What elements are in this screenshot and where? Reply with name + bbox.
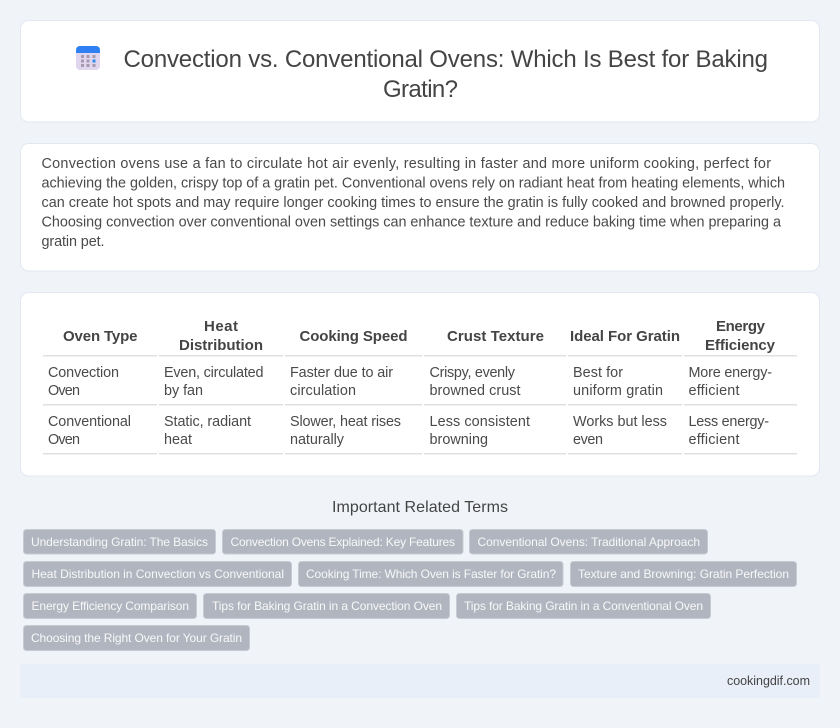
table row: convection oven: More energy- <box>688 365 772 381</box>
intro paragraph: achieving the golden, crispy top of a gratin pet. Conventional ovens rely on radiant heat from heating elements, which <box>42 176 785 192</box>
intro paragraph <box>42 156 785 250</box>
table header row: Cooking Speed <box>300 328 408 345</box>
table header row: Crust Texture <box>447 328 544 345</box>
tag <box>570 562 796 586</box>
tag <box>222 530 463 554</box>
panel: intro text <box>20 144 820 271</box>
tag <box>24 594 196 618</box>
title: Gratin? <box>383 76 458 103</box>
table header row: Oven Type <box>63 328 138 345</box>
panel: title header <box>20 20 820 122</box>
table row: conventional oven: Conventional <box>48 414 131 430</box>
tag: Cooking Time: Which Oven is Faster for Gratin? <box>306 567 556 581</box>
table row: convection oven: Crispy, evenly <box>430 365 516 381</box>
table row: convection oven: Oven <box>48 383 80 399</box>
table row: convection oven: circulation <box>290 383 356 399</box>
tag <box>456 594 710 618</box>
tag <box>24 626 250 650</box>
tag: Energy Efficiency Comparison <box>32 599 189 613</box>
table row: convection oven: by fan <box>164 383 203 399</box>
icon: calendar <box>76 46 100 70</box>
table row: conventional oven: efficient <box>688 432 740 448</box>
table row: convection oven: browned crust <box>430 383 520 399</box>
table header row: Distribution <box>179 337 263 354</box>
table row: conventional oven: heat <box>164 432 192 448</box>
intro paragraph: Convection ovens use a fan to circulate hot air evenly, resulting in faster and more uniform cooking, perfect for <box>42 156 771 172</box>
tag <box>470 530 708 554</box>
table row: conventional oven: browning <box>430 432 488 448</box>
table header row: Ideal For Gratin <box>570 328 680 345</box>
tag <box>24 530 216 554</box>
table row: conventional oven: Less consistent <box>430 414 530 430</box>
tag: Heat Distribution in Convection vs Conventional <box>32 567 284 581</box>
table row: convection oven: Faster due to air <box>290 365 393 381</box>
tag: Convection Ovens Explained: Key Features <box>230 535 455 549</box>
tag <box>204 594 450 618</box>
panel: related term tags <box>24 530 796 650</box>
table row: convection oven: uniform gratin <box>573 383 663 399</box>
title: Convection vs. Conventional Ovens: Which Is Best for Baking <box>124 46 768 73</box>
table row: conventional oven: Works but less <box>573 414 667 430</box>
tag: Choosing the Right Oven for Your Gratin <box>31 631 242 645</box>
intro paragraph: gratin pet. <box>42 234 104 250</box>
table header row: Efficiency <box>705 337 776 354</box>
table row: conventional oven: even <box>573 432 603 448</box>
tag: Tips for Baking Gratin in a Conventional Oven <box>464 599 703 613</box>
table row: conventional oven: Less energy- <box>688 414 769 430</box>
table row: convection oven: Even, circulated <box>164 365 264 381</box>
table row: convection oven: Best for <box>573 365 623 381</box>
table header row: Heat <box>204 318 238 335</box>
footer <box>20 664 820 698</box>
tag <box>24 562 292 586</box>
table row: conventional oven: Static, radiant <box>164 414 251 430</box>
tag <box>298 562 563 586</box>
table row: convection oven: Convection <box>48 365 119 381</box>
table row: conventional oven: Oven <box>48 432 80 448</box>
heading: important related terms: Important Related Terms <box>332 499 508 516</box>
footer: cookingdif.com <box>727 674 810 688</box>
tag: Tips for Baking Gratin in a Convection Oven <box>212 599 442 613</box>
table row: convection oven: efficient <box>688 383 740 399</box>
intro paragraph: can create hot spots and may require longer cooking times to ensure the gratin is fully cooked and browned properly. <box>42 195 784 211</box>
table row: conventional oven: naturally <box>290 432 345 448</box>
table row: conventional oven: Slower, heat rises <box>290 414 401 430</box>
title <box>124 46 768 103</box>
table row: convection oven <box>48 365 772 399</box>
table header row: Energy <box>716 318 766 335</box>
table header row <box>63 318 776 354</box>
tag: Conventional Ovens: Traditional Approach <box>478 535 700 549</box>
intro paragraph: Choosing convection over conventional oven settings can enhance texture and reduce baking time when preparing a <box>42 214 781 230</box>
table row: conventional oven <box>48 414 769 448</box>
tag: Texture and Browning: Gratin Perfection <box>578 567 789 581</box>
panel: comparison table <box>20 292 820 476</box>
tag: Understanding Gratin: The Basics <box>31 535 208 549</box>
